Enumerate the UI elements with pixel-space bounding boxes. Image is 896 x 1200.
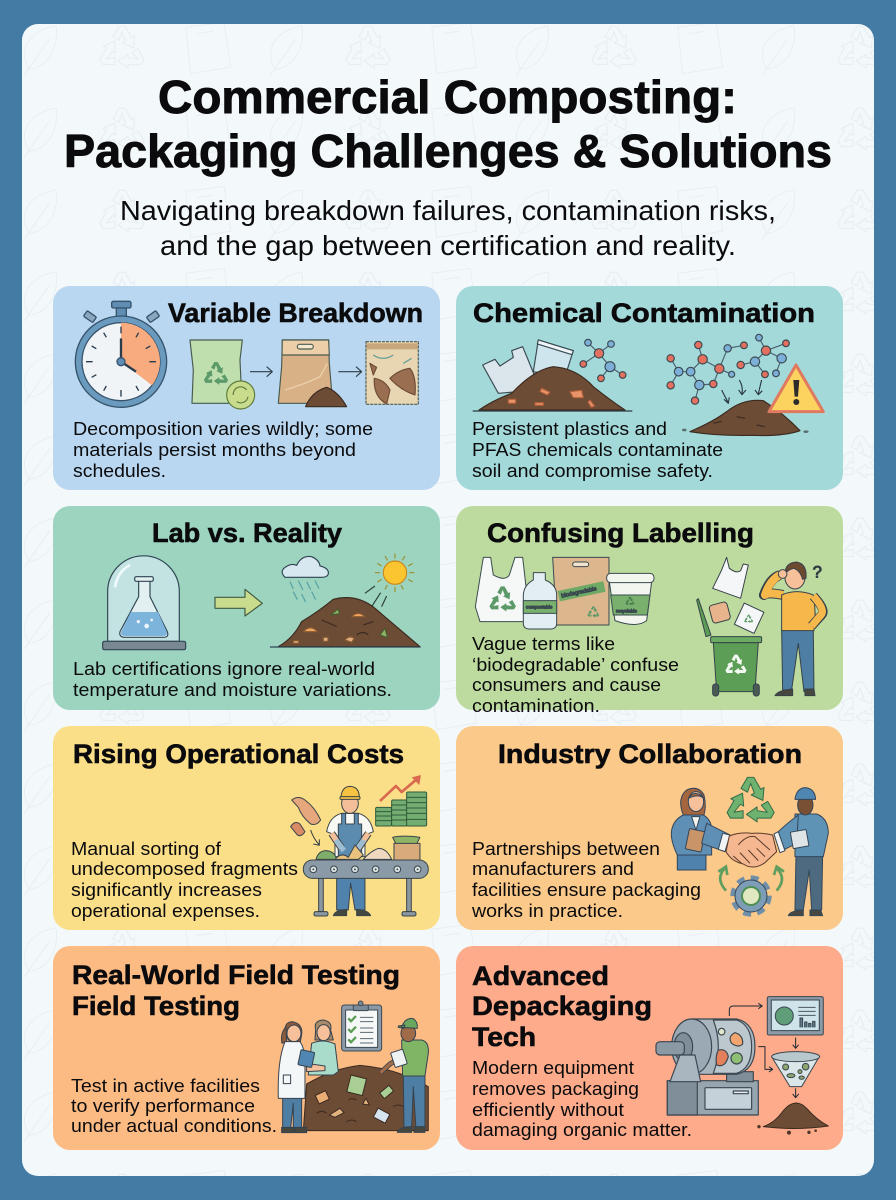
icon: PFAS molecules and warning — [667, 334, 823, 436]
title: Packaging Challenges & Solutions — [64, 125, 832, 177]
body text: real-world field testing: to verify performance — [71, 1095, 255, 1116]
heading: real-world field testing — [72, 960, 400, 1021]
body text: confusing labelling: Vague terms like — [472, 633, 615, 654]
body text: chemical contamination — [472, 418, 723, 481]
panel: lab vs reality — [53, 506, 440, 710]
heading: lab vs reality: Lab vs. Reality — [152, 518, 342, 548]
body text: confusing labelling — [472, 633, 679, 716]
title: Commercial Composting: — [158, 71, 737, 123]
panel: real-world field testing — [53, 946, 440, 1150]
icon: monitor, funnel and compost output — [729, 997, 828, 1135]
subtitle: and the gap between certification and reality. — [160, 230, 736, 261]
icon: woman with folder — [671, 788, 730, 870]
icon: handshake — [726, 833, 777, 867]
body text: rising operational costs: Manual sorting of — [71, 838, 222, 859]
body text: real-world field testing: Test in active facilities — [71, 1075, 260, 1096]
title — [64, 71, 832, 177]
body text: advanced depackaging tech: damaging organic matter. — [472, 1119, 692, 1140]
panel: chemical contamination — [456, 286, 843, 490]
subtitle — [120, 195, 776, 261]
body text: variable breakdown: materials persist months beyond — [73, 439, 356, 460]
icon: packaging with labels: biodegradable — [561, 586, 597, 600]
panel: variable breakdown — [53, 286, 440, 490]
body text: variable breakdown: schedules. — [73, 460, 166, 481]
subtitle: Navigating breakdown failures, contamination risks, — [120, 195, 776, 226]
icon: packaging with labels — [475, 557, 654, 629]
body text: lab vs reality — [73, 658, 392, 700]
body text: lab vs reality: Lab certifications ignore real-world — [73, 658, 375, 679]
body text: chemical contamination: PFAS chemicals contaminate — [472, 439, 723, 460]
icon: man with tablet — [774, 788, 828, 916]
icon: money stacks and rising arrow — [376, 775, 427, 826]
body text: industry collaboration: Partnerships between — [472, 838, 660, 859]
arrow: lab to reality — [215, 589, 262, 616]
body text: advanced depackaging tech — [472, 1057, 692, 1140]
body text: chemical contamination: Persistent plastics and — [472, 418, 667, 439]
heading: real-world field testing: Real-World Field Testing — [72, 960, 400, 990]
body text: real-world field testing: under actual conditions. — [71, 1115, 277, 1136]
icon: three field testers — [278, 1019, 428, 1133]
body text: rising operational costs: operational expenses. — [71, 900, 260, 921]
icon: packaging with labels: recyclable — [616, 609, 637, 614]
body text: variable breakdown: Decomposition varies wildly; some — [73, 418, 373, 439]
body text: advanced depackaging tech: Modern equipment — [472, 1057, 634, 1078]
body text: industry collaboration — [471, 838, 701, 921]
heading: advanced depackaging tech: Depackaging — [472, 991, 652, 1021]
body text: real-world field testing — [71, 1075, 277, 1136]
icon: depackaging drum machine — [656, 1019, 758, 1115]
panel: industry collaboration — [456, 726, 843, 930]
body text: rising operational costs: undecomposed fragments — [71, 858, 298, 879]
icon: confused person at recycling bin — [697, 557, 823, 696]
icon: compost pile with packaging samples — [303, 1065, 428, 1131]
icon: recycling symbol — [722, 777, 777, 827]
body text: industry collaboration: works in practice. — [471, 900, 623, 921]
panel: advanced depackaging tech — [456, 946, 843, 1150]
body text: confusing labelling: contamination. — [472, 695, 600, 716]
body text: advanced depackaging tech: efficiently without — [472, 1099, 624, 1120]
body text: rising operational costs — [71, 838, 298, 921]
icon: flask under bell jar — [103, 556, 186, 650]
body text: confusing labelling: ‘biodegradable’ confuse — [472, 654, 679, 675]
body text: industry collaboration: manufacturers and — [472, 858, 634, 879]
body text: chemical contamination: soil and compromise safety. — [472, 460, 713, 481]
heading: variable breakdown: Variable Breakdown — [168, 298, 423, 328]
heading: rising operational costs: Rising Operational Costs — [73, 739, 404, 769]
icon: plastics in soil — [473, 339, 632, 411]
body text: rising operational costs: significantly increases — [71, 879, 262, 900]
heading: confusing labelling: Confusing Labelling — [487, 518, 754, 548]
heading: advanced depackaging tech — [472, 961, 652, 1052]
heading: real-world field testing: Field Testing — [72, 991, 240, 1021]
panel: rising operational costs — [53, 726, 440, 930]
body text: lab vs reality: temperature and moisture variations. — [73, 679, 392, 700]
icon: gear with green arrows — [718, 867, 784, 914]
icon: stopwatch — [75, 301, 167, 407]
icon: weather over compost pile — [270, 553, 421, 647]
icon: worker sorting on conveyor — [291, 786, 428, 916]
icon: compost bag stages — [190, 340, 418, 409]
icon: confused person at recycling bin: ? — [813, 562, 822, 581]
body text: variable breakdown — [73, 418, 373, 481]
body text: industry collaboration: facilities ensure packaging — [472, 879, 701, 900]
icon: packaging with labels: compostable — [526, 605, 553, 610]
heading: advanced depackaging tech: Tech — [472, 1022, 536, 1052]
icon: clipboard checklist — [342, 1001, 382, 1051]
body text: confusing labelling: consumers and cause — [472, 674, 661, 695]
panel: confusing labelling — [456, 506, 843, 716]
body text: advanced depackaging tech: removes packaging — [472, 1078, 639, 1099]
heading: chemical contamination: Chemical Contamination — [473, 298, 815, 328]
heading: advanced depackaging tech: Advanced — [472, 961, 609, 991]
heading: industry collaboration: Industry Collaboration — [498, 739, 802, 769]
